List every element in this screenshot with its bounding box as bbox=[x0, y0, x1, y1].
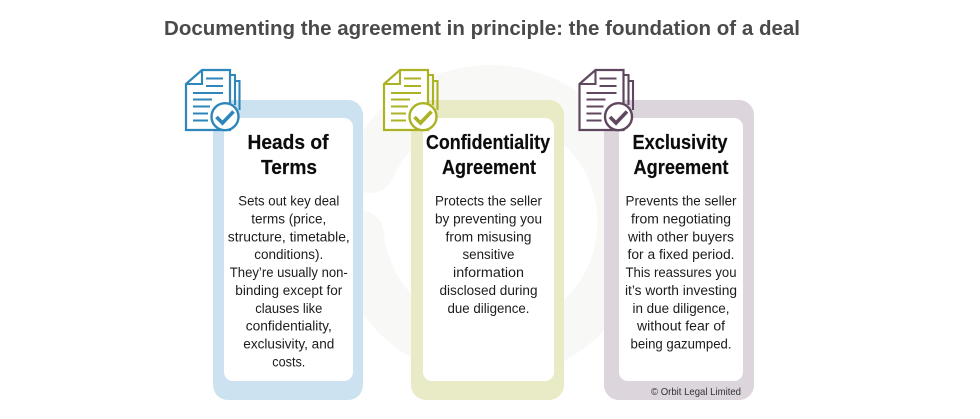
text block: Exclusivity Agreement description: without fear of bbox=[636, 319, 725, 334]
text block: Exclusivity Agreement description: with other buyers bbox=[627, 229, 734, 244]
text block: Heads of Terms description: confidentiality, bbox=[246, 319, 332, 334]
heading: Confidentiality Agreement: Confidentiality bbox=[426, 132, 551, 154]
text block: Confidentiality Agreement description: sensitive bbox=[462, 247, 514, 262]
heading: Exclusivity Agreement: Exclusivity bbox=[632, 132, 728, 154]
text block: Heads of Terms description: exclusivity, and bbox=[243, 336, 334, 352]
copyright note: © Orbit Legal Limited bbox=[651, 386, 741, 398]
text block: Confidentiality Agreement description: by preventing you bbox=[435, 212, 542, 226]
text block: Exclusivity Agreement description: Prevents the seller bbox=[626, 194, 737, 209]
text block: Confidentiality Agreement description: due diligence. bbox=[448, 301, 530, 316]
text block: Exclusivity Agreement description: in due diligence, bbox=[632, 301, 730, 316]
heading: Confidentiality Agreement: Agreement bbox=[442, 157, 536, 179]
text block: Confidentiality Agreement description: from misusing bbox=[446, 229, 532, 244]
text block: Confidentiality Agreement description: information bbox=[453, 265, 524, 280]
text block: Exclusivity Agreement description: being gazumped. bbox=[630, 336, 732, 352]
text block: Heads of Terms description: clauses like bbox=[255, 301, 322, 316]
text block: Exclusivity Agreement description: it’s worth investing bbox=[625, 283, 737, 298]
icon: olive document with check bbox=[384, 70, 438, 130]
panel: Heads of Terms bbox=[213, 100, 363, 400]
text block: Heads of Terms description: costs. bbox=[272, 354, 305, 369]
text block: Confidentiality Agreement description: disclosed during bbox=[440, 283, 538, 298]
panel: Exclusivity Agreement bbox=[604, 100, 754, 400]
background: faint orbit ring watermark bbox=[359, 90, 622, 354]
text block: Exclusivity Agreement description: This reassures you bbox=[626, 265, 736, 280]
text block: Exclusivity Agreement description: from negotiating bbox=[631, 212, 731, 226]
heading: Confidentiality Agreement bbox=[426, 132, 551, 179]
heading: Heads of Terms: Terms bbox=[261, 157, 317, 179]
icon: blue document with check bbox=[186, 70, 240, 130]
heading: Heads of Terms: Heads of bbox=[248, 132, 329, 154]
text block: Heads of Terms description: conditions). bbox=[254, 247, 323, 262]
heading: Heads of Terms bbox=[248, 132, 329, 179]
icon: plum document with check bbox=[580, 70, 633, 130]
heading: Exclusivity Agreement: Agreement bbox=[634, 157, 729, 179]
text block: Exclusivity Agreement description bbox=[625, 194, 737, 352]
text block: Confidentiality Agreement description bbox=[435, 194, 542, 316]
text block: Heads of Terms description: They’re usually non- bbox=[230, 265, 348, 280]
text block: Heads of Terms description: Sets out key deal bbox=[238, 194, 339, 209]
panel: Confidentiality Agreement bbox=[411, 100, 564, 400]
text block: Confidentiality Agreement description: Protects the seller bbox=[435, 194, 542, 209]
text block: Heads of Terms description bbox=[228, 194, 350, 369]
text block: Exclusivity Agreement description: for a fixed period. bbox=[628, 247, 734, 262]
heading: Exclusivity Agreement bbox=[632, 132, 729, 179]
text block: Heads of Terms description: terms (price, bbox=[251, 212, 326, 226]
text block: Heads of Terms description: binding except for bbox=[235, 283, 343, 298]
title: Documenting the agreement in principle: the foundation of a deal bbox=[164, 17, 800, 40]
text block: Heads of Terms description: structure, timetable, bbox=[228, 229, 350, 244]
